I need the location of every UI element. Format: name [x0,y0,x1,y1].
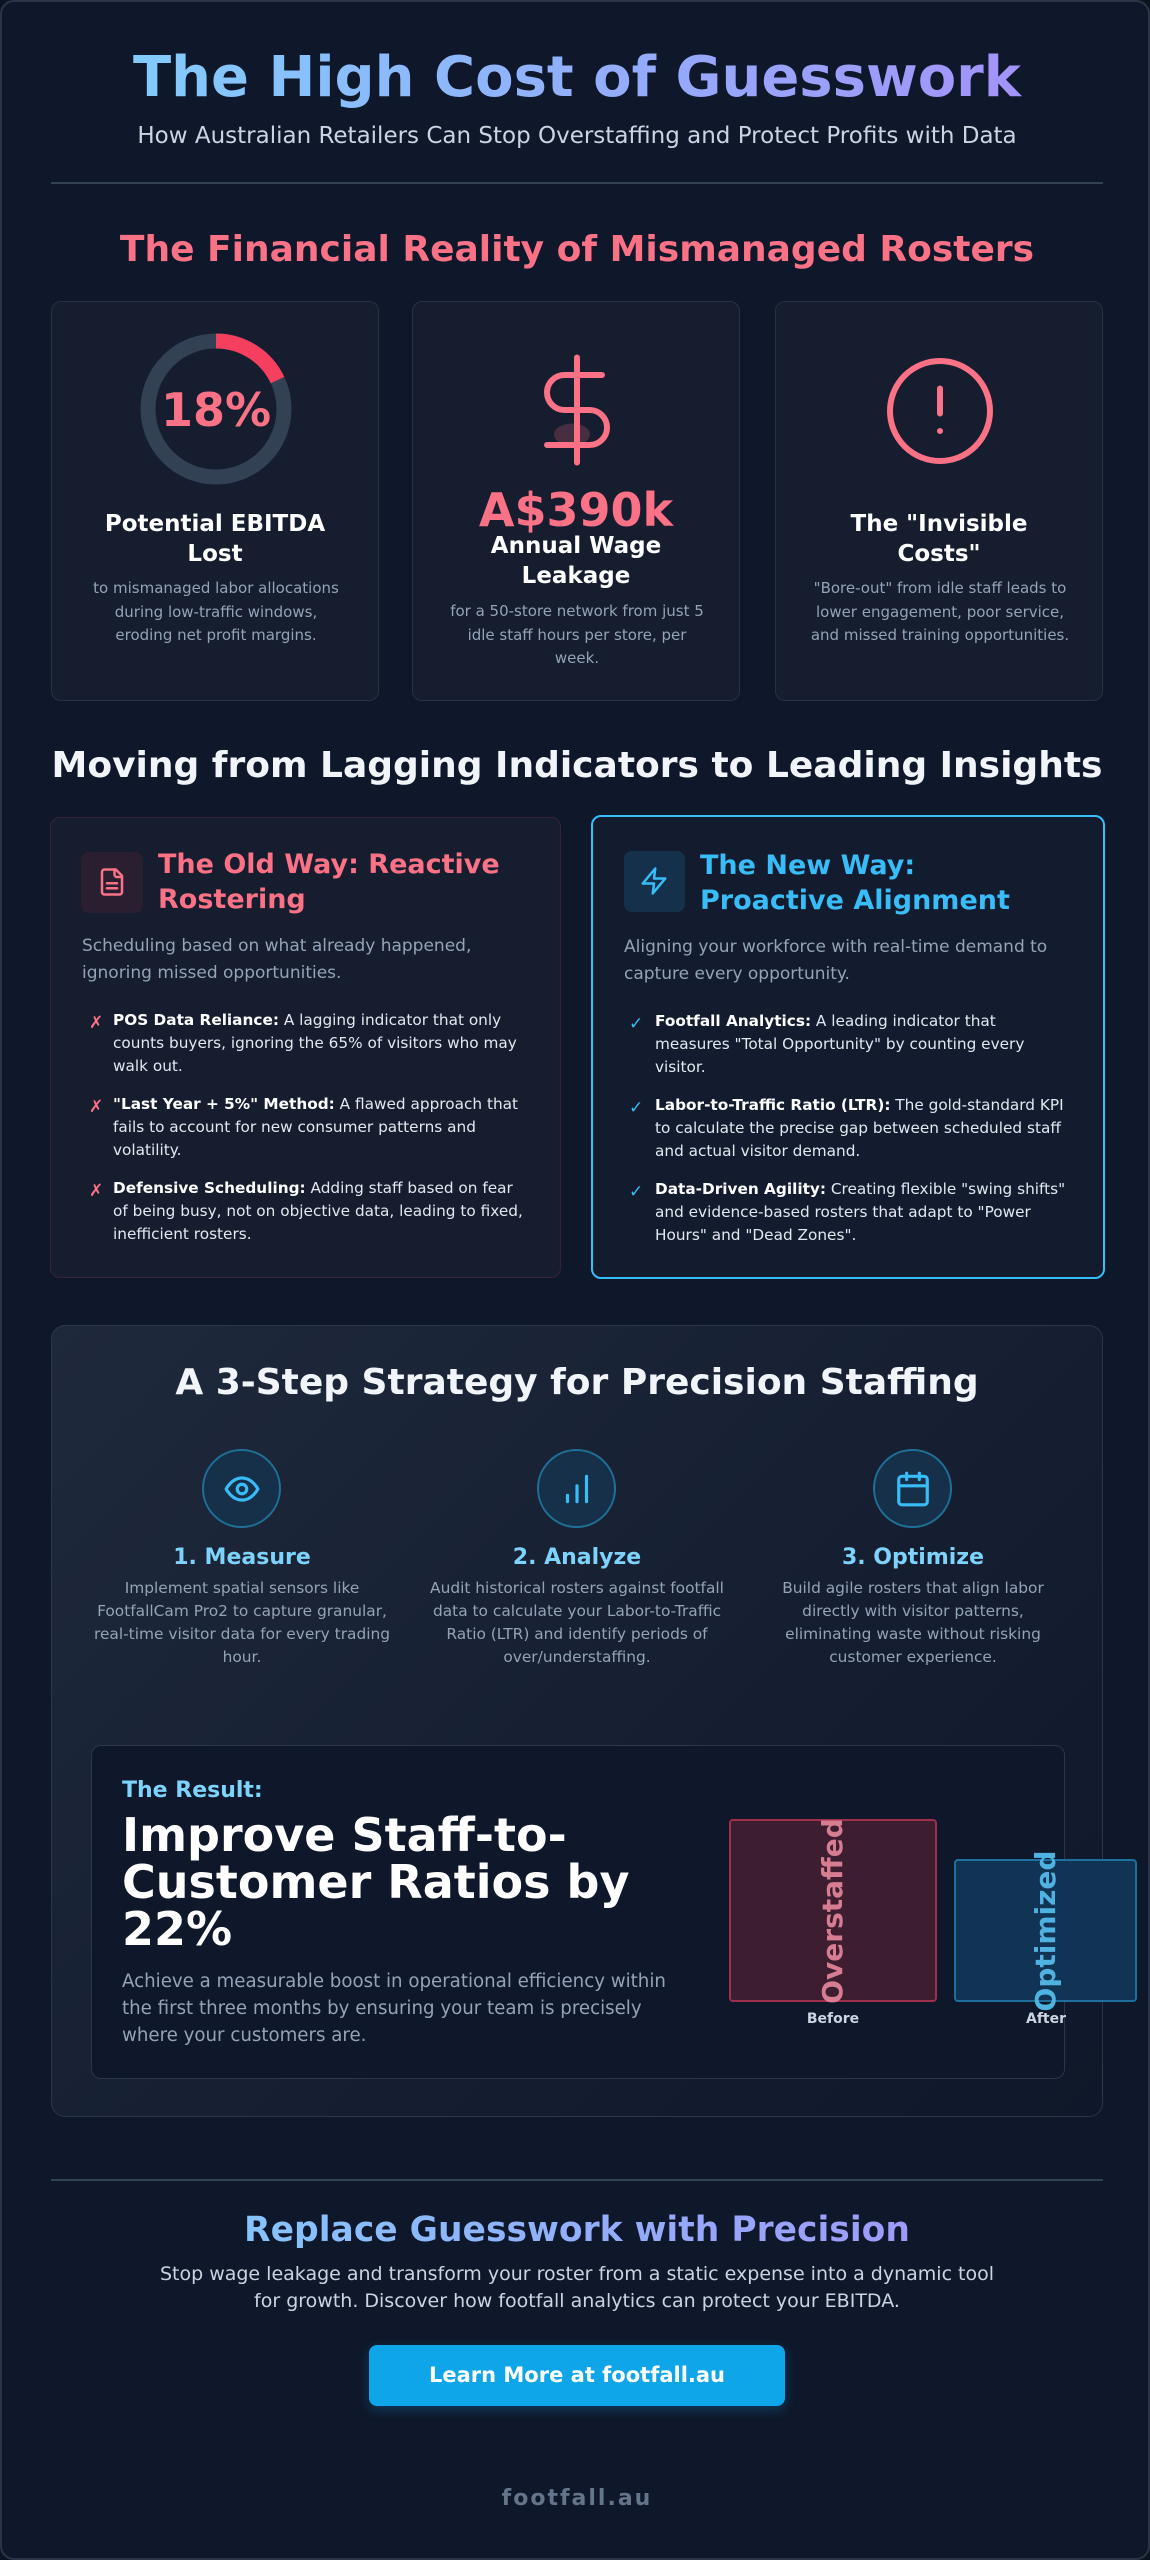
bullet: last year: ✗ [89,1097,103,1117]
panel heading: The New Way: [700,850,915,881]
panel: old way [50,817,561,1278]
bullet: POS: POS Data Reliance: A lagging indicator that only counts buyers, ignoring the 65% of visitors who may walk out. [113,1011,517,1075]
panel heading: Proactive Alignment [700,885,1010,916]
step: analyze: 2. Analyze [513,1545,641,1570]
footer brand: footfall.au [502,2486,652,2511]
card heading: The "Invisible [850,511,1027,537]
step: measure [94,1449,390,1666]
result label: The Result: [122,1778,263,1803]
bar chart: before vs after: Optimized [1029,1851,1062,2011]
panel: new way [591,815,1105,1279]
donut chart 18% [140,334,292,484]
result box [91,1745,1065,2079]
icon: zap [624,851,685,912]
card description: to mismanaged labor allocations during low-traffic windows, eroding net profit margins. [93,579,339,644]
bullet: agility: ✓ [629,1182,643,1202]
card heading [490,533,661,589]
card heading: Lost [187,541,243,567]
CTA description [160,2263,994,2312]
step: optimize [782,1449,1044,1666]
bullet: footfall analytics: Footfall Analytics: A leading indicator that measures "Total Opportunity" by counting every visitor. [655,1012,1024,1076]
card: wage leakage [412,301,740,701]
bar chart: before vs after [729,1818,1137,2027]
label: before: Before [807,2011,859,2027]
card heading: Costs" [897,541,981,567]
bullet: last year: "Last Year + 5%" Method: A flawed approach that fails to account for new consumer patterns and volatility. [113,1095,518,1159]
heading: 3-step: A 3-Step Strategy for Precision Staffing [175,1362,979,1403]
panel heading: The Old Way: Reactive [158,849,500,880]
subtitle: How Australian Retailers Can Stop Overstaffing and Protect Profits with Data [137,123,1017,149]
result headline: Customer Ratios by [122,1855,629,1909]
step: analyze [430,1449,724,1666]
CTA button [369,2345,785,2406]
CTA button: Learn More at footfall.au [429,2363,725,2387]
bullet: LTR: ✓ [629,1098,643,1118]
CTA description: for growth. Discover how footfall analytics can protect your EBITDA. [254,2290,900,2312]
label: after: After [1026,2011,1066,2027]
panel heading [700,850,1010,916]
panel description: Scheduling based on what already happened, ignoring missed opportunities. [82,936,471,983]
step: measure: 1. Measure [173,1545,311,1570]
heading: lagging to leading: Moving from Lagging Indicators to Leading Insights [52,745,1102,786]
step: optimize: Build agile rosters that align labor directly with visitor patterns, eliminating waste without risking customer experience. [782,1579,1044,1666]
panel heading [158,849,500,915]
result headline: Improve Staff-to- [122,1808,567,1862]
card description: for a 50-store network from just 5 idle staff hours per store, per week. [450,602,704,667]
heading: financial reality: The Financial Reality of Mismanaged Rosters [120,229,1034,270]
step: measure: Implement spatial sensors like FootfallCam Pro2 to capture granular, real-time visitor data for every trading hour. [94,1579,390,1666]
icon: calendar [873,1449,952,1528]
card heading [850,511,1027,567]
card description: "Bore-out" from idle staff leads to lower engagement, poor service, and missed training opportunities. [811,579,1069,644]
icon: bar chart [537,1449,616,1528]
title: The High Cost of Guesswork [133,45,1021,110]
bar chart: before vs after: Overstaffed [816,1818,849,2004]
CTA heading: Replace Guesswork with Precision [244,2210,910,2250]
result headline: 22% [122,1902,232,1956]
CTA heading [2,2209,1150,2251]
bullet: defensive: ✗ [89,1181,103,1201]
panel: 3-step strategy [51,1325,1103,2117]
icon: alert circle [887,358,993,464]
icon: eye [202,1449,281,1528]
bullet: footfall analytics: ✓ [629,1014,643,1034]
result description: Achieve a measurable boost in operational efficiency within the first three months by ensuring your team is precisely where your customers are. [122,1971,666,2046]
bar: optimized [954,1859,1137,2002]
icon: file [81,852,143,913]
step: optimize: 3. Optimize [842,1545,984,1570]
CTA description: Stop wage leakage and transform your roster from a static expense into a dynamic tool [160,2263,994,2285]
card: invisible costs [775,301,1103,701]
card heading: Leakage [522,563,630,589]
bullet: agility: Data-Driven Agility: Creating flexible "swing shifts" and evidence-based rosters that adapt to "Power Hours" and "Dead Zones". [655,1180,1065,1244]
bullet: LTR: Labor-to-Traffic Ratio (LTR): The gold-standard KPI to calculate the precise gap between scheduled staff and actual visitor demand. [655,1096,1064,1160]
card: EBITDA lost [51,301,379,701]
donut chart 18%: 18% [161,383,271,437]
step: analyze: Audit historical rosters against footfall data to calculate your Labor-to-Traffic Ratio (LTR) and identify periods of over/understaffing. [430,1579,724,1666]
bullet: POS: ✗ [89,1013,103,1033]
card heading [105,511,325,567]
result headline [122,1808,629,1956]
card heading: Annual Wage [491,533,661,559]
bullet: defensive: Defensive Scheduling: Adding staff based on fear of being busy, not on objective data, leading to fixed, inefficient rosters. [113,1179,523,1243]
icon: dollar [544,354,610,466]
panel description: Aligning your workforce with real-time demand to capture every opportunity. [624,937,1047,984]
stat value: A$390k [479,483,673,537]
panel heading: Rostering [158,884,306,915]
bar: overstaffed [729,1819,937,2002]
card heading: Potential EBITDA [105,511,325,537]
